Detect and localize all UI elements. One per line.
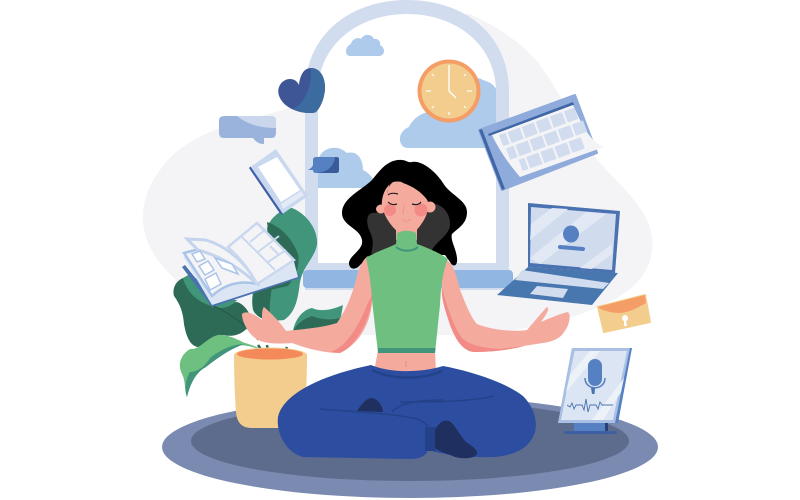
laptop keyboard [515,270,609,289]
hair back [342,160,467,269]
microphone tablet [558,348,632,434]
leaf: lower light [180,335,263,397]
laptop person icon [563,226,579,242]
nose and mouth [402,205,411,221]
stems [258,345,287,352]
leaf: right [293,305,343,331]
chat bubble small [308,157,339,173]
cloud: right [400,78,496,148]
calendar grid [499,106,592,174]
clock [418,60,480,122]
window sill [303,270,513,288]
book page block [183,256,298,305]
laptop [497,203,620,305]
ear left [376,204,386,214]
right arm [442,260,570,352]
woman [242,160,570,459]
cloud: top [346,35,384,56]
waveform [567,399,613,412]
book cover edge [182,265,300,307]
plant [173,208,343,397]
pants [278,365,536,459]
rug [162,396,658,498]
eyes and brows [388,193,421,205]
neck [396,220,417,240]
collar fold [396,247,418,251]
belly [374,350,436,372]
icon: heart [278,68,325,113]
pants folds [320,396,493,438]
ear right [424,202,436,212]
envelope [598,295,650,332]
foot left [357,398,383,412]
laptop touchpad [530,286,568,298]
book [182,223,300,307]
cloud: left [318,148,378,188]
microphone icon [588,359,602,386]
laptop screen [528,203,620,273]
background blob [143,10,652,335]
left arm [242,256,373,353]
calendar paper [492,105,604,177]
hair shade right [416,203,450,250]
leaf: back shade [253,282,272,321]
pants waistband shade [372,370,442,378]
calendar [479,95,604,190]
speech bubble [219,116,276,144]
hair shade left [367,212,397,254]
book right page [228,223,294,284]
book left back page [187,239,257,284]
tablet screen [558,348,632,423]
green top [366,231,448,353]
book left lower page [184,247,257,296]
flower pot [234,348,307,428]
hair fringe [387,168,434,201]
window [303,0,513,290]
sock [425,427,436,451]
laptop base [497,267,618,305]
top hem [378,348,436,353]
leaf: left dark [173,278,252,347]
leaf: back large [252,208,317,321]
face [382,181,428,231]
book left cells [192,251,238,290]
tablet stand [574,421,608,432]
phone [249,149,308,215]
foot right [435,421,477,458]
cheeks [384,204,396,216]
